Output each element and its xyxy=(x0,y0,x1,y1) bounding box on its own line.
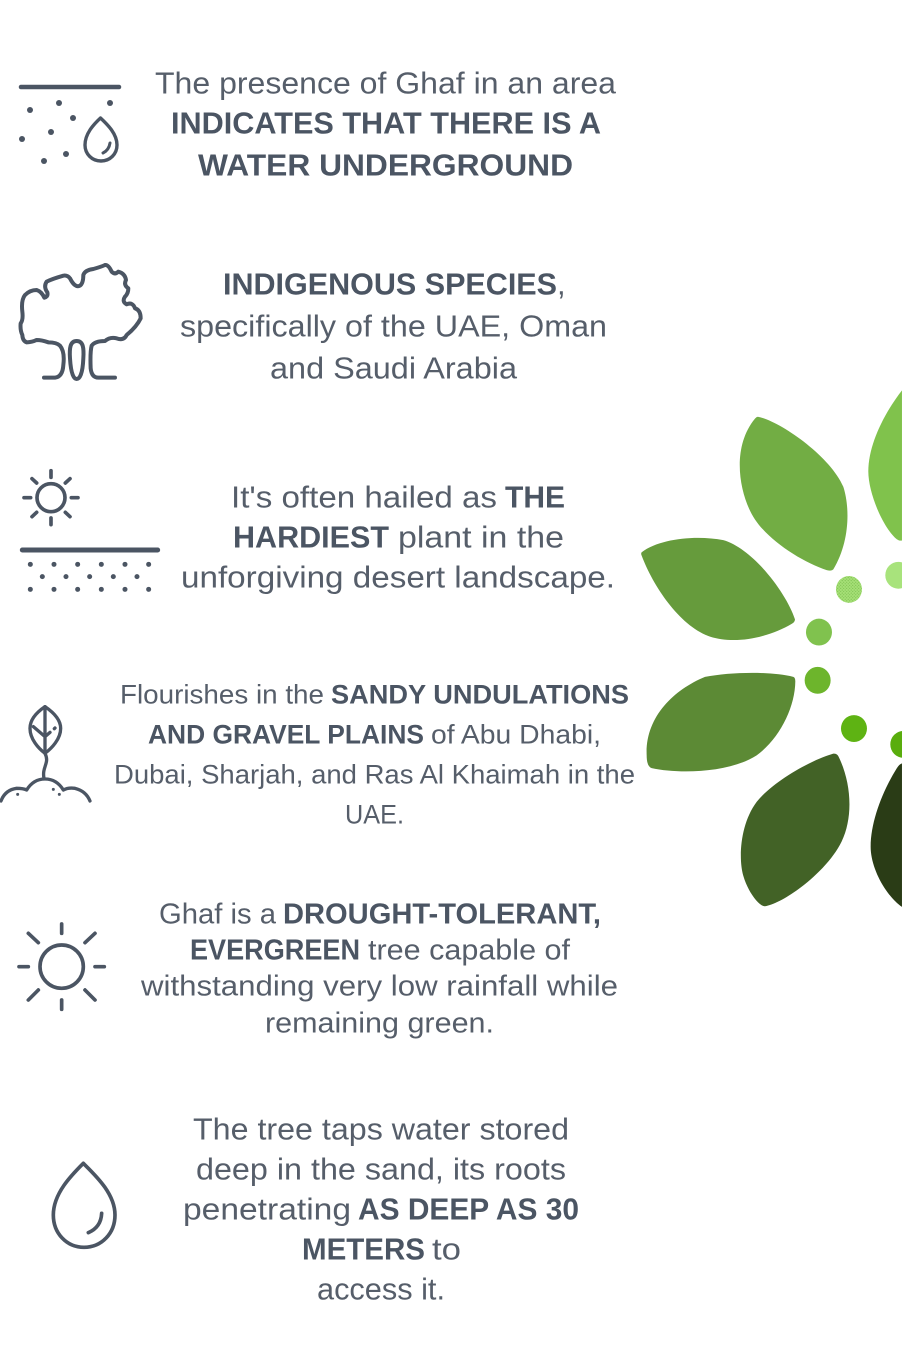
text: drought tolerant xyxy=(140,898,618,1040)
text: indigenous species xyxy=(180,266,607,386)
leaf: upper xyxy=(740,417,847,571)
text: tap roots: penetrating xyxy=(183,1192,351,1226)
text: drought tolerant: remaining green. xyxy=(265,1008,494,1040)
text: tap roots xyxy=(183,1112,579,1306)
text: presence of Ghaf xyxy=(155,66,617,182)
icon: tree xyxy=(21,265,141,379)
text: drought tolerant: DROUGHT-TOLERANT, xyxy=(283,898,601,930)
text: drought tolerant: tree capable of xyxy=(368,934,571,966)
text: hardiest plant: THE xyxy=(505,480,565,514)
text: sandy undulations: SANDY UNDULATIONS xyxy=(331,680,629,710)
text: tap roots: AS DEEP AS 30 xyxy=(358,1192,579,1226)
text: drought tolerant: withstanding very low rainfall while xyxy=(140,970,618,1002)
icon: water underground xyxy=(19,87,119,164)
text: sandy undulations: AND GRAVEL PLAINS xyxy=(148,720,424,750)
text: hardiest plant: unforgiving desert landscape. xyxy=(181,560,615,594)
text: hardiest plant: plant in the xyxy=(398,520,564,554)
text: hardiest plant: HARDIEST xyxy=(233,520,389,554)
dots xyxy=(805,562,902,758)
text: drought tolerant: Ghaf is a xyxy=(159,898,277,930)
icon: sprout on sand xyxy=(1,707,90,801)
text: hardiest plant xyxy=(181,480,615,594)
text: sandy undulations: Dubai, Sharjah, and Ras Al Khaimah in the xyxy=(114,760,635,790)
text: indigenous species: INDIGENOUS SPECIES xyxy=(223,266,557,302)
leaf: lower left xyxy=(647,673,795,771)
text: presence of Ghaf: The presence of Ghaf in an area xyxy=(155,66,617,100)
text: tap roots: to xyxy=(432,1232,461,1266)
text: hardiest plant: It's often hailed as xyxy=(231,480,497,514)
leaf: bottom xyxy=(741,754,849,906)
text: tap roots: access it. xyxy=(317,1272,445,1306)
text: indigenous species: specifically of the UAE, Oman xyxy=(180,308,607,344)
decorative leaf flower xyxy=(641,390,902,907)
text: indigenous species: , xyxy=(557,266,566,302)
leaf: top right xyxy=(868,390,902,541)
text: presence of Ghaf: WATER UNDERGROUND xyxy=(198,148,573,182)
text: tap roots: The tree taps water stored xyxy=(193,1112,569,1146)
icon: sun over desert xyxy=(22,471,158,592)
text: sandy undulations: Flourishes in the xyxy=(120,680,324,710)
text: tap roots: deep in the sand, its roots xyxy=(196,1152,566,1186)
text: tap roots: METERS xyxy=(302,1232,425,1266)
icon: sun xyxy=(19,924,104,1009)
leaf: bottom right xyxy=(871,763,902,907)
text: sandy undulations xyxy=(114,680,635,830)
text: sandy undulations: UAE. xyxy=(345,800,404,830)
text: presence of Ghaf: INDICATES THAT THERE IS A xyxy=(171,106,601,140)
text: drought tolerant: EVERGREEN xyxy=(190,934,360,966)
icon: water drop xyxy=(53,1163,115,1247)
text: sandy undulations: of Abu Dhabi, xyxy=(431,720,601,750)
leaf: left xyxy=(641,538,795,640)
text: indigenous species: and Saudi Arabia xyxy=(270,350,518,386)
